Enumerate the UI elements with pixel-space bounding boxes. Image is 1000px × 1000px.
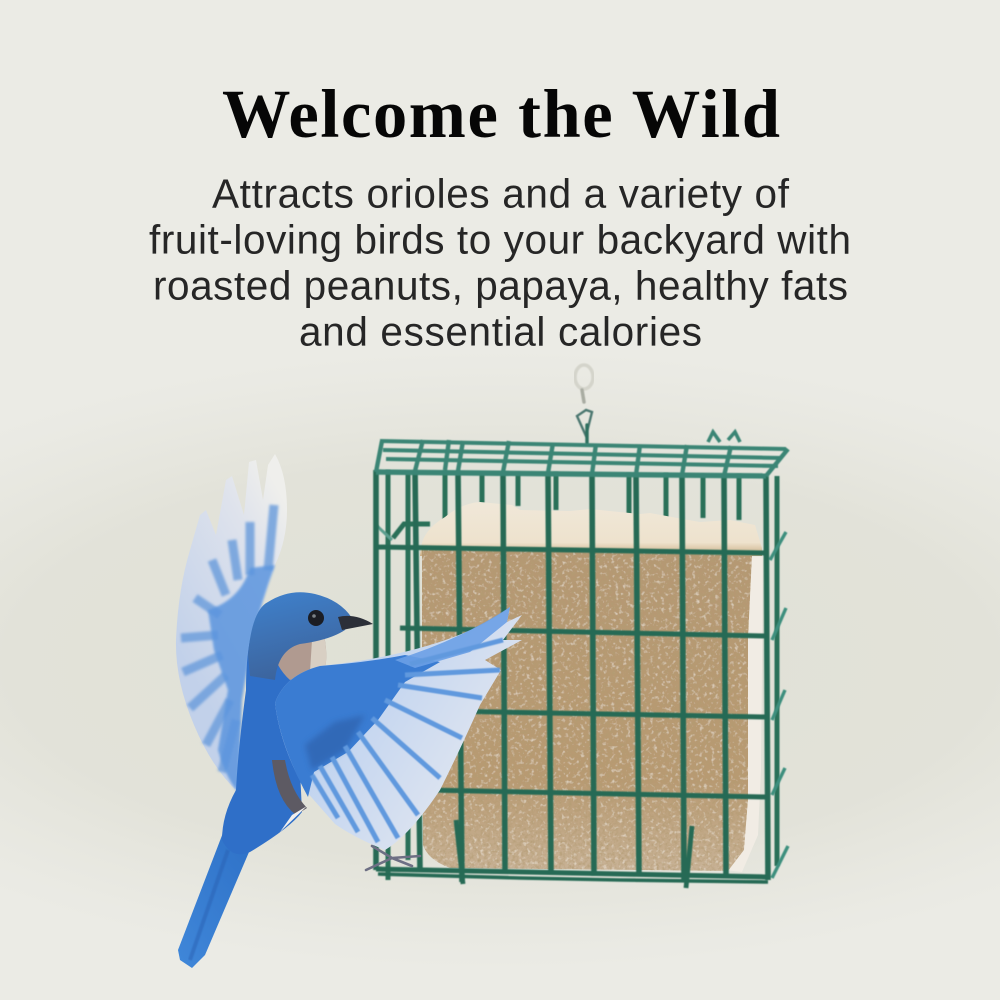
wing feather stripes	[312, 640, 503, 842]
body text: fruit-loving birds to your backyard with	[149, 216, 851, 262]
suet white right edge	[725, 550, 763, 872]
wing dark mottling	[305, 715, 365, 770]
far wing blue coverts	[208, 565, 275, 792]
bottom pins	[456, 820, 692, 888]
near wing	[275, 607, 522, 850]
belly patch	[272, 760, 307, 815]
suet seed body	[422, 548, 752, 871]
top lid	[376, 432, 788, 476]
foot	[366, 846, 420, 870]
beak	[338, 616, 373, 630]
body text	[149, 170, 851, 354]
breast	[268, 635, 326, 680]
body text: and essential calories	[299, 308, 702, 354]
body text: roasted peanuts, papaya, healthy fats	[153, 262, 848, 308]
tail	[178, 825, 252, 968]
eye	[308, 610, 324, 626]
wing blue coverts	[275, 655, 440, 797]
body	[222, 640, 302, 854]
wing upper primaries	[395, 607, 510, 668]
vertical bars	[376, 470, 768, 882]
right side clips	[770, 532, 788, 878]
bird	[176, 454, 522, 968]
head	[248, 592, 352, 680]
far wing	[176, 454, 287, 792]
cage front wires	[376, 432, 788, 888]
title: Welcome the Wild	[222, 76, 780, 152]
hanging hook	[575, 365, 593, 443]
cage back wires	[376, 470, 777, 880]
suet creamy top	[420, 502, 762, 556]
horizontal rows	[376, 547, 768, 882]
suet cake	[420, 502, 763, 872]
body text: Attracts orioles and a variety of	[212, 170, 790, 216]
